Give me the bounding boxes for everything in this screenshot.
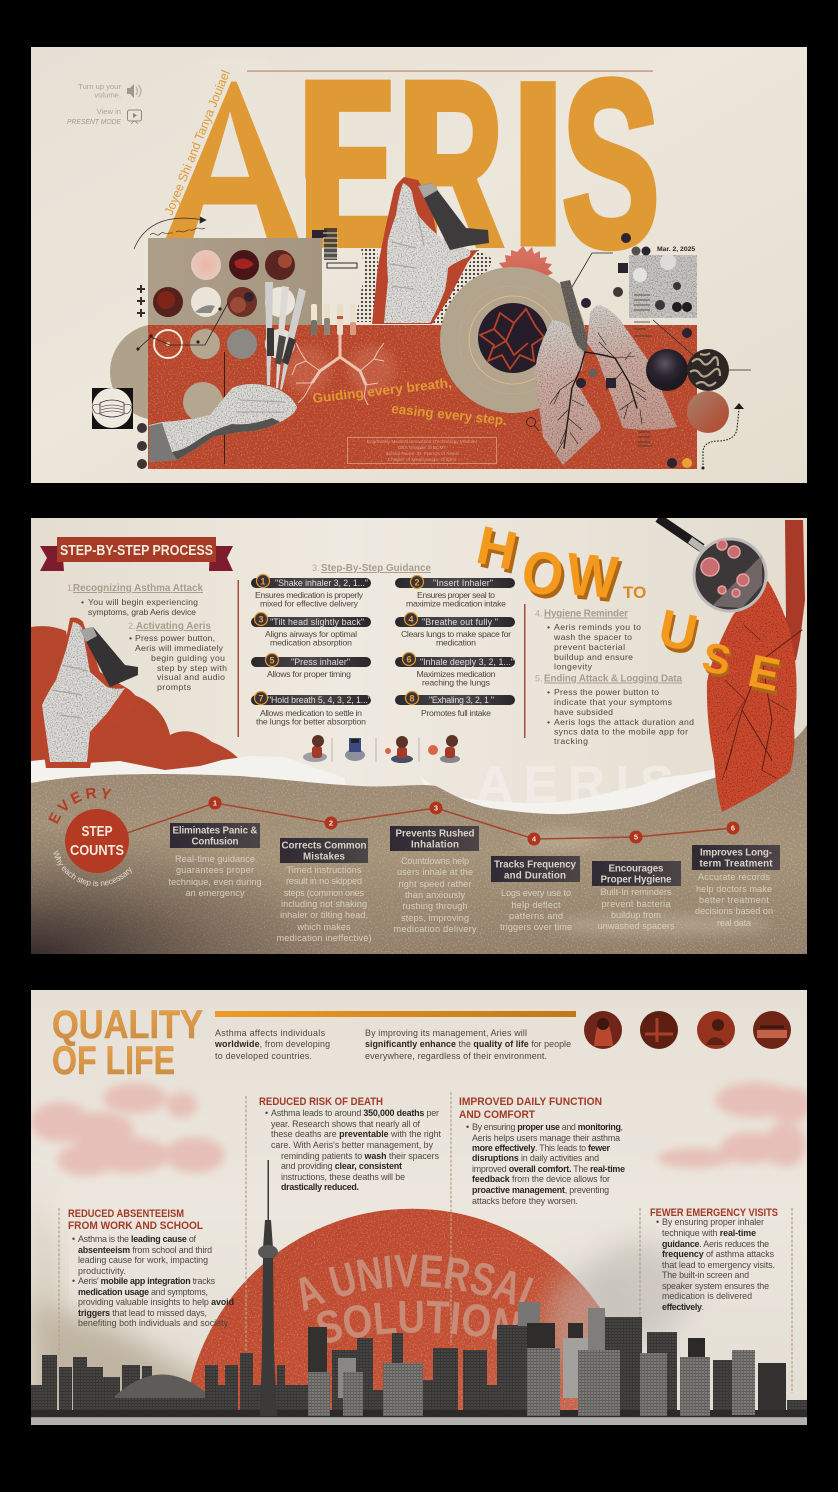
reduced absenteeism: benefiting both individuals and society [78, 1318, 229, 1328]
stadium dome [115, 1374, 205, 1398]
every step counts badge: EVERY [48, 788, 112, 824]
gloved hand [149, 384, 297, 462]
benefit 2: steps (common ones [284, 888, 364, 898]
step 5 text [535, 674, 694, 746]
reduced risk of death: drastically reduced. [281, 1182, 359, 1192]
step 2 text: prompts [157, 682, 192, 692]
number badges: 8 [409, 694, 415, 704]
improved daily function: • [466, 1122, 469, 1132]
reduced risk of death: and providing clear, consistent [281, 1161, 402, 1171]
HOW TO USE title: W [564, 541, 621, 612]
benefit 1: Confusion [192, 836, 239, 848]
fewer emergency visits: The built-in screen and [662, 1270, 749, 1280]
red panel [148, 325, 697, 469]
magnifier icon [526, 418, 539, 431]
intro text left: to developed countries. [215, 1051, 312, 1061]
benefit 6 [692, 845, 780, 928]
AERIS title: I [507, 32, 569, 295]
instruction pills: "Tilt head slightly back" [270, 617, 364, 627]
banner [40, 537, 233, 571]
benefit 1: technique, even during [168, 877, 262, 887]
instruction descriptions: Clears lungs to make space for [401, 629, 511, 639]
step 2 text: visual and audio [157, 672, 225, 682]
callout lines [572, 253, 751, 446]
reduced absenteeism: absenteeism from school and third [78, 1245, 212, 1255]
benefit 6: Improves Long- [700, 848, 772, 858]
fewer emergency visits [650, 1207, 778, 1312]
grey haze on sun [545, 1265, 635, 1375]
credits box: School Name: St. Francis of Assisi [385, 451, 459, 457]
improved daily function: IMPROVED DAILY FUNCTION [459, 1096, 602, 1108]
reduced absenteeism: providing valuable insights to help avoid [78, 1297, 234, 1307]
fewer emergency visits: FEWER EMERGENCY VISITS [650, 1207, 778, 1219]
benefit 3: rushing through [402, 901, 468, 911]
benefit 4: and Duration [504, 870, 566, 882]
sphere [646, 349, 688, 391]
instruction pills: "Press inhaler" [291, 657, 350, 667]
number badges [254, 574, 424, 704]
reduced risk of death: year. Research shows that nearly all of [271, 1119, 421, 1129]
intro text right: everywhere, regardless of their environment. [365, 1051, 547, 1061]
intro text right: By improving its management, Aries will [365, 1028, 527, 1038]
step 4 text: Hygiene Reminder [544, 608, 628, 620]
present mode hint: View in [97, 107, 121, 116]
benefit 6: Accurate records [698, 872, 770, 882]
instruction pills: "Hold breath 5, 4, 3, 2, 1..." [268, 695, 371, 705]
benefit 2: Corrects Common [282, 840, 367, 852]
step 4 text: longevity [554, 662, 593, 672]
step 4 text: buildup and ensure [554, 652, 633, 662]
benefit 2 [276, 838, 372, 943]
benefit 1: Eliminates Panic & [172, 826, 258, 836]
step 5 text: Ending Attack & Logging Data [544, 674, 683, 684]
instruction descriptions: maximize medication intake [406, 598, 506, 608]
fewer emergency visits: speaker system ensures the [662, 1281, 769, 1291]
benefit 3: steps, improving [401, 913, 469, 923]
city skyline [31, 1302, 807, 1417]
speckle highlights [520, 830, 770, 935]
credits box: GBS Chapter of BCMT [398, 445, 446, 451]
title [52, 1003, 203, 1083]
instruction descriptions: mixed for effective delivery [260, 598, 359, 608]
timeline: 5 [634, 832, 638, 842]
benefit 2: inhaler or tilting head, [280, 910, 368, 920]
tagline: easing every step. [391, 401, 508, 428]
benefit 2: including not shaking [281, 899, 367, 909]
small dots and squares [576, 233, 692, 468]
micrograph [629, 254, 697, 318]
step 5 text: 5. [535, 674, 543, 684]
halftone strips [355, 247, 494, 324]
benefit 2: Mistakes [303, 852, 346, 862]
pink clouds right [657, 1082, 812, 1168]
number badges: 2 [414, 578, 420, 588]
instruction pills: "Breathe out fully " [422, 617, 498, 627]
patterned circle [687, 349, 729, 391]
tagline: Guiding every breath, [312, 375, 452, 406]
step 5 text: have subsided [554, 707, 613, 717]
reduced absenteeism: Aeris' mobile app integration tracks [78, 1276, 216, 1286]
title: OF LIFE [52, 1039, 175, 1083]
HOW TO USE title [472, 515, 787, 705]
step 4 text: 4. [535, 608, 543, 618]
step 1 text: You will begin experiencing [88, 597, 198, 607]
title: QUALITY [52, 1003, 203, 1047]
improved daily function: proactive management, preventing [472, 1185, 609, 1195]
tan semicircle [110, 325, 148, 419]
volume hint: volume. [94, 90, 121, 100]
step 4 text: prevent bacterial [554, 642, 625, 652]
plus signs [137, 285, 145, 317]
reduced risk of death: • [265, 1108, 268, 1118]
every step counts badge: Why each step is necessary [54, 850, 132, 887]
step 4 text: Aeris reminds you to [554, 622, 641, 632]
improved daily function [459, 1096, 625, 1206]
improved daily function: more effectively. This leads to fewer [472, 1143, 611, 1153]
fewer emergency visits: By ensuring proper inhaler [662, 1217, 764, 1227]
mask icon [92, 388, 133, 429]
reduced absenteeism: Asthma is the leading cause of [78, 1234, 197, 1244]
step 1 text: Recognizing Asthma Attack [73, 583, 204, 594]
benefit 5: unwashed spacers [598, 921, 675, 931]
intro text left: Asthma affects individuals [215, 1028, 326, 1038]
benefit 6: decisions based on [695, 906, 773, 916]
number badges: 7 [258, 694, 264, 704]
step 2 text: begin guiding you [151, 653, 225, 663]
panel: quality of life slide [31, 990, 807, 1425]
reduced risk of death: care. With Aeris's better management, by [271, 1140, 434, 1150]
instruction descriptions [255, 590, 511, 726]
improved daily function: AND COMFORT [459, 1109, 535, 1121]
benefit 4: Tracks Frequency [494, 860, 577, 870]
HOW TO USE title: H [472, 515, 522, 582]
step 3 heading: 3. [312, 563, 320, 573]
benefit 4: patterns and [509, 911, 563, 921]
timeline: 2 [329, 818, 333, 828]
panel: how to use slide [31, 518, 807, 954]
benefit 5: prevent bacteria [602, 899, 671, 909]
HOW TO USE title: U [654, 599, 702, 664]
reduced risk of death: Asthma leads to around 350,000 deaths per [271, 1108, 439, 1118]
reduced risk of death: reminding patients to wash their spacers [281, 1151, 440, 1161]
present mode hint: PRESENT MODE [67, 117, 122, 126]
benefit 4: triggers over time [500, 922, 572, 932]
benefit 6: better treatment [699, 895, 769, 905]
benefit 1: Real-time guidance [175, 854, 255, 864]
instruction descriptions: reaching the lungs [422, 678, 491, 688]
photo circles [584, 1011, 791, 1049]
benefit 3: users inhale at the [397, 867, 473, 877]
benefit 6: term Treatment [700, 858, 773, 870]
instruction descriptions: Promotes full intake [421, 708, 491, 718]
syringes [265, 282, 306, 390]
fewer emergency visits: • [656, 1217, 659, 1227]
volume hint [78, 84, 142, 98]
benefit 2: result in no skipped [286, 876, 362, 886]
HOW TO USE title: W [567, 545, 624, 616]
benefit 2: which makes [296, 922, 351, 932]
torn paper [31, 756, 722, 815]
number badges: 3 [258, 614, 264, 624]
timeline: 4 [532, 834, 537, 844]
instruction pills: "Shake inhaler 3, 2, 1..." [275, 578, 368, 588]
step 5 text: • [547, 717, 550, 727]
dashed column rules [59, 1092, 792, 1393]
timeline: 3 [434, 804, 438, 812]
instruction descriptions: Aligns airways for optimal [265, 629, 357, 639]
step 1 text: symptoms, grab Aeris device [88, 607, 196, 617]
bronchi illustration [283, 335, 396, 405]
HOW TO USE title: U [656, 603, 704, 668]
fewer emergency visits: guidance. Aeris reduces the [662, 1239, 769, 1249]
orange bar [215, 1011, 576, 1017]
red sun [184, 1209, 640, 1425]
benefit 2: Timed instructions [286, 865, 362, 875]
instruction descriptions: Allows for proper timing [267, 669, 351, 679]
benefit 6: real data [717, 918, 752, 928]
reduced risk of death: these deaths are preventable with the right [271, 1129, 442, 1139]
step 1 text [67, 583, 204, 617]
benefit 3 [390, 826, 479, 934]
every step counts badge: COUNTS [70, 842, 124, 859]
tan collage panel [148, 238, 322, 325]
step 4 text [535, 608, 641, 672]
step 2 text: step by step with [157, 663, 227, 673]
number badges: 6 [406, 654, 412, 664]
reduced absenteeism: productivity. [78, 1266, 126, 1276]
ring and connector [136, 303, 295, 359]
AERIS title: A [155, 33, 305, 296]
intro text left [214, 1028, 330, 1061]
instruction descriptions: Maximizes medication [416, 669, 496, 679]
reduced absenteeism: leading cause for work, impacting [78, 1255, 208, 1265]
fewer emergency visits: technique with real-time [662, 1228, 756, 1238]
photo circles [153, 250, 295, 317]
instruction descriptions: Allows medication to settle in [260, 708, 362, 718]
reduced absenteeism: FROM WORK AND SCHOOL [68, 1220, 203, 1232]
instruction descriptions: medication [436, 638, 476, 648]
benefit 3: Prevents Rushed [396, 828, 475, 840]
lungs [535, 280, 677, 465]
instruction pills [251, 578, 515, 705]
AERIS title [166, 76, 656, 252]
benefit 4 [491, 856, 580, 932]
improved daily function: By ensuring proper use and monitoring, [472, 1122, 623, 1132]
instruction pills: "Exhaling 3, 2, 1 " [429, 695, 494, 705]
step 2 text: • [129, 633, 132, 643]
step 2 text [128, 621, 227, 692]
step 5 text: syncs data to the mobile app for [554, 726, 688, 736]
improved daily function: feedback from the device allows for [472, 1174, 610, 1184]
right divider [524, 604, 526, 738]
divider left [238, 580, 239, 737]
concentric disc [440, 267, 586, 413]
step 1 text: • [81, 597, 84, 607]
timeline: 1 [213, 798, 217, 808]
inhaler hand [372, 177, 489, 324]
benefit 4: Logs every use to [501, 888, 571, 898]
a universal solution arc text [300, 1254, 534, 1343]
red lung [707, 520, 805, 812]
improved daily function: disruptions in daily activities and [472, 1153, 599, 1163]
reduced absenteeism: REDUCED ABSENTEEISM [68, 1208, 184, 1220]
HOW TO USE title: S [698, 633, 735, 685]
pink clouds left [30, 1083, 225, 1176]
benefit 5: Built-In reminders [600, 887, 672, 897]
number badges: 1 [260, 576, 266, 586]
instruction pills: "Insert Inhaler" [433, 578, 493, 588]
reduced absenteeism: • [72, 1234, 75, 1244]
improved daily function: Aeris helps users manage their asthma [472, 1133, 620, 1143]
lung veins [550, 333, 646, 454]
number badges: 5 [269, 656, 275, 666]
fewer emergency visits: effectively. [662, 1302, 704, 1312]
step 2 text: Aeris will immediately [135, 643, 224, 653]
HOW TO USE title: E [744, 644, 785, 701]
step 4 text: wash the spacer to [553, 632, 632, 642]
benefit 2: medication ineffective) [276, 933, 372, 943]
benefit 6: help doctors make [696, 884, 772, 894]
benefit 1 [168, 823, 262, 898]
benefit 3: right speed rather [398, 879, 472, 889]
reduced risk of death [259, 1096, 442, 1192]
improved daily function: attacks before they worsen. [472, 1196, 578, 1206]
AERIS title: R [397, 31, 504, 295]
benefit 5 [592, 861, 681, 931]
fewer emergency visits: medication is delivered [662, 1291, 752, 1301]
HOW TO USE title: H [475, 519, 525, 586]
dotted arrow [702, 403, 744, 470]
tan circle [183, 382, 223, 422]
benefit 3: Countdowns help [401, 856, 469, 866]
HOW TO USE title: S [700, 636, 737, 688]
step 5 text: • [547, 687, 550, 697]
benefit 5: buildup from [611, 910, 661, 920]
every step counts badge [48, 788, 132, 887]
benefit 3: Inhalation [411, 840, 459, 850]
vials [311, 304, 356, 335]
timeline: 6 [731, 824, 735, 832]
gradient ball [687, 391, 729, 433]
step 5 text: indicate that your symptoms [554, 697, 673, 707]
a universal solution arc text: SOLUTION [317, 1300, 518, 1343]
reduced risk of death: REDUCED RISK OF DEATH [259, 1096, 383, 1108]
step 4 text: • [547, 622, 550, 632]
intro text right [365, 1028, 571, 1061]
intro text left: worldwide, from developing [214, 1039, 330, 1049]
number badges: 4 [408, 614, 414, 624]
improved daily function: improved overall comfort. The real-time [472, 1164, 625, 1174]
benefit 3: than anxiously [405, 890, 465, 900]
benefit 1: guarantees proper [176, 865, 254, 875]
step 5 text: tracking [554, 736, 588, 746]
top rule [247, 70, 653, 72]
starburst [499, 246, 553, 276]
HOW TO USE title: O [520, 541, 572, 614]
instruction descriptions: medication absorption [270, 638, 352, 648]
HOW TO USE title: E [746, 648, 787, 705]
fewer emergency visits: that lead to emergency visits. [662, 1260, 775, 1270]
fewer emergency visits: frequency of asthma attacks [662, 1249, 775, 1259]
date: Mar. 2, 2025 [657, 246, 695, 253]
timeline [127, 796, 740, 846]
instruction pills: "Inhale deeply 3, 2, 1..." [420, 657, 514, 667]
HOW TO USE title: O [517, 537, 569, 610]
dots [137, 423, 147, 469]
reduced absenteeism [68, 1208, 234, 1328]
every step counts badge: STEP [82, 823, 112, 840]
barcode [312, 228, 357, 268]
intro text right: significantly enhance the quality of life for people [365, 1039, 571, 1049]
reduced absenteeism: triggers that lead to missed days, [78, 1308, 207, 1318]
present mode hint [67, 108, 142, 124]
AERIS title: E [297, 32, 398, 295]
tagline [312, 375, 508, 428]
benefit 5: Proper Hygiene [600, 874, 672, 886]
a universal solution arc text: A UNIVERSAL [300, 1254, 534, 1312]
benefit 5: Encourages [608, 864, 664, 874]
left hand with inhaler [38, 618, 140, 768]
benefit 4: help deflect [512, 900, 561, 910]
banner: STEP-BY-STEP PROCESS [60, 543, 213, 559]
CN tower [258, 1160, 278, 1417]
magnifying glass [658, 518, 766, 611]
signature arrow [134, 217, 206, 249]
credits box: Chapter of Mississauga, Ontario [388, 457, 457, 463]
ghost AERIS word: AERIS [476, 756, 674, 814]
volume hint: Turn up your [78, 82, 121, 91]
authors: Joyee Shi and Tanya Jouiael [162, 68, 233, 217]
red cloud [31, 626, 238, 775]
credits box [348, 438, 496, 464]
step 3 heading: Step-By-Step Guidance [321, 563, 432, 574]
step 5 text: Press the power button to [554, 687, 659, 697]
step 2 text: 2. [128, 621, 136, 631]
water [31, 1416, 807, 1425]
reduced risk of death: instructions, these deaths will be [281, 1172, 405, 1182]
benefit 3: medication delivery [394, 924, 477, 934]
instruction descriptions: the lungs for better absorption [256, 716, 366, 726]
HOW TO USE title: TO [623, 583, 646, 602]
instruction descriptions: Ensures medication is properly [255, 590, 364, 600]
step 2 text: Press power button, [135, 633, 215, 643]
taupe band [31, 725, 807, 954]
step 5 text: Aeris logs the attack duration and [554, 717, 694, 727]
children illustrations [303, 735, 460, 763]
credits box: Eng/Sanky Medical Innovation (Technology Module) [367, 439, 478, 445]
step 1 text: 1. [67, 583, 75, 593]
instruction descriptions: Ensures proper seal to [417, 590, 495, 600]
reduced absenteeism: • [72, 1276, 75, 1286]
step 2 text: Activating Aeris [136, 621, 212, 632]
panel: title slide [31, 31, 807, 483]
reduced absenteeism: medication usage and symptoms, [78, 1287, 208, 1297]
AERIS title: S [562, 31, 660, 295]
benefit 1: an emergency [186, 888, 245, 898]
